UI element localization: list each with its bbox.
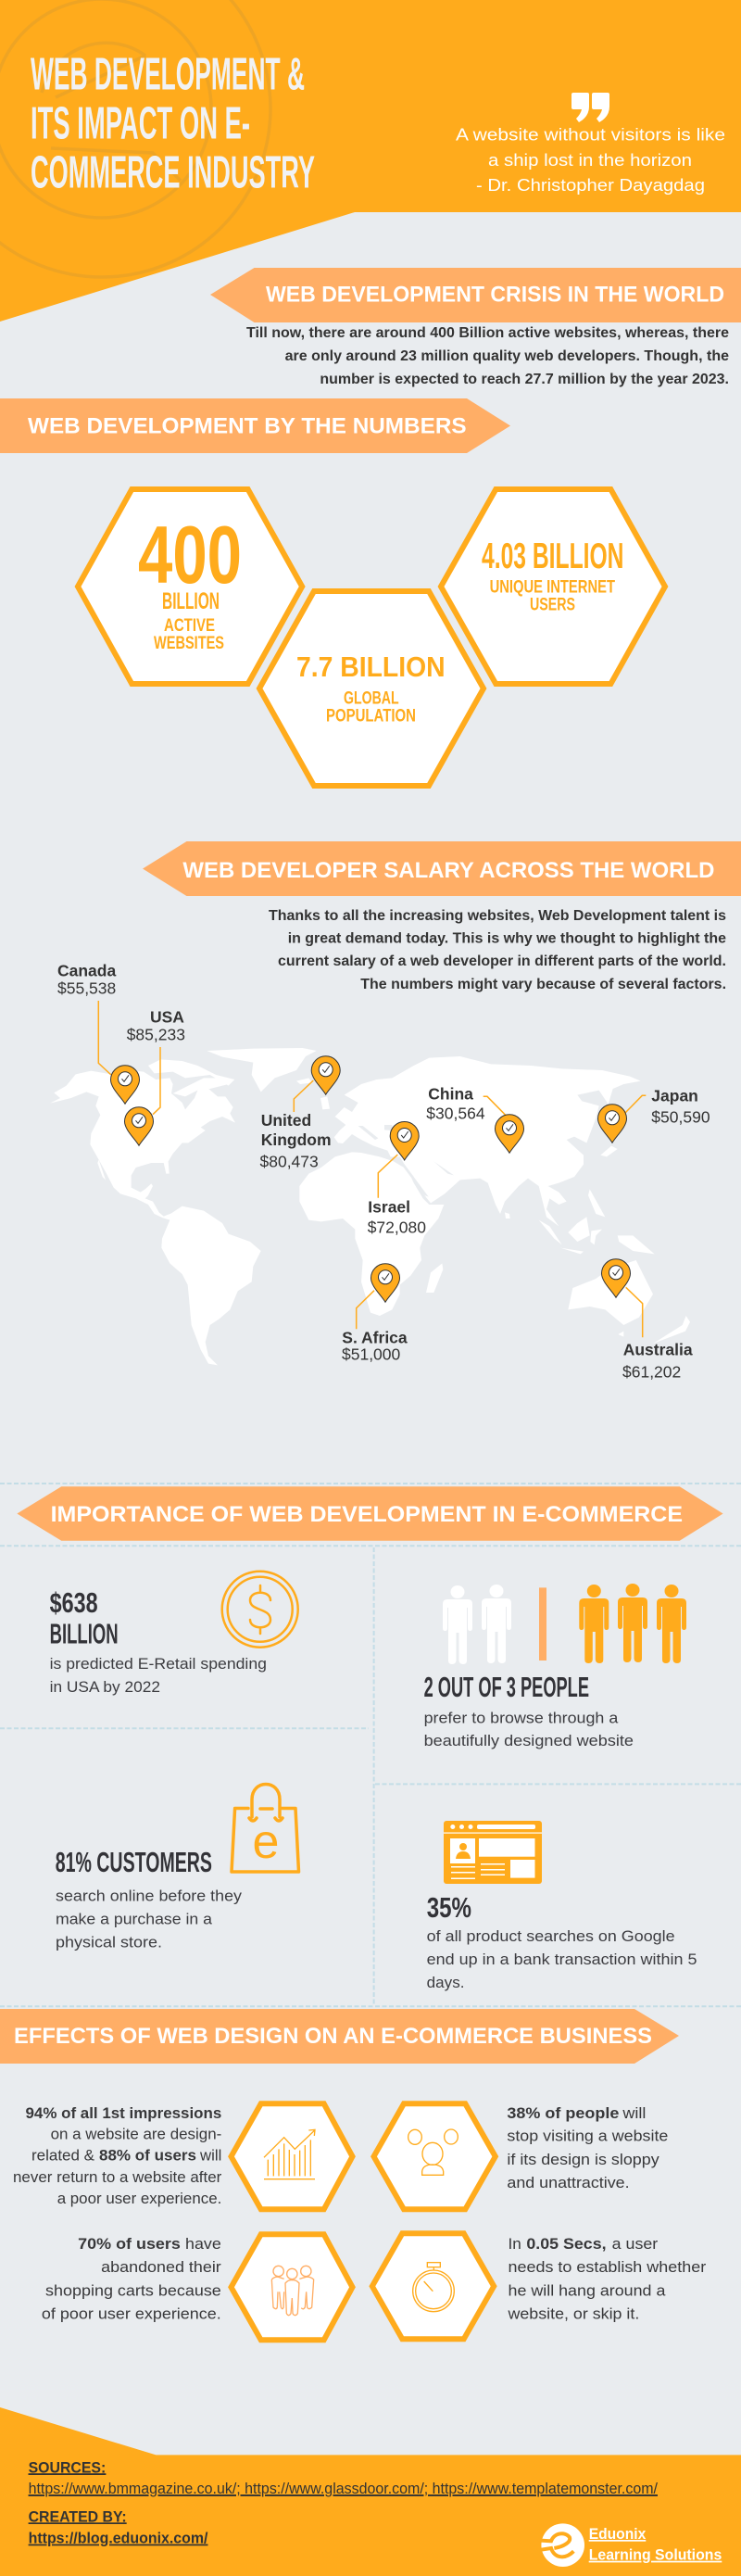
label: Japan xyxy=(651,1086,710,1127)
icon: pin Canada xyxy=(111,1066,139,1104)
text: 94% first impressions xyxy=(13,2104,222,2207)
label: Israel: Israel xyxy=(368,1197,410,1216)
stat: 2 out of 3 people xyxy=(424,1671,634,1749)
heading: crisis in the world: WEB DEVELOPMENT CRISIS IN THE WORLD xyxy=(266,283,724,308)
icon: pin Japan xyxy=(598,1105,626,1143)
label: Australia: Australia xyxy=(623,1341,693,1359)
label: China xyxy=(426,1085,485,1123)
label: USA: USA xyxy=(150,1007,184,1026)
icon: shopping bag: e xyxy=(253,1815,279,1869)
icon: pin South Africa xyxy=(370,1264,400,1302)
text: 70% of users xyxy=(42,2235,221,2322)
text: 70% of users: shopping carts because xyxy=(45,2281,221,2299)
hexagon: 7.7 billion global population: 7.7 BILLION xyxy=(296,651,446,683)
salary paragraph: Thanks to all the increasing websites, Web Development talent is xyxy=(269,908,726,924)
heading: by the numbers: WEB DEVELOPMENT BY THE NUMBERS xyxy=(28,414,467,439)
stat: 2 out of 3 people: prefer to browse through a xyxy=(424,1709,619,1726)
hexagon: 4.03 billion unique internet users: 4.03 BILLION xyxy=(482,537,624,576)
text: 38% of people: stop visiting a website xyxy=(507,2128,668,2145)
text: 94% first impressions: 88% of users xyxy=(99,2147,196,2165)
icon: people 2 of 3 xyxy=(443,1584,686,1664)
text: 0.05 secs: a user xyxy=(612,2235,659,2253)
stat: 35%: 35% xyxy=(427,1891,471,1924)
text: 70% of users: of poor user experience. xyxy=(42,2305,221,2322)
stat: 35%: of all product searches on Google xyxy=(427,1927,675,1945)
text: 38% of people: 38% of people xyxy=(507,2104,619,2122)
quote text xyxy=(456,126,725,195)
label: United Kingdom: Kingdom xyxy=(261,1130,332,1149)
crisis paragraph xyxy=(246,325,729,387)
text: 70% of users: abandoned their xyxy=(101,2258,221,2276)
label: Australia xyxy=(622,1341,693,1382)
stat: 81% customers: 81% CUSTOMERS xyxy=(56,1846,212,1878)
hexagon icon: faces xyxy=(374,2103,496,2209)
stat: $638 billion: in USA by 2022 xyxy=(50,1678,160,1696)
label: USA xyxy=(127,1007,185,1043)
hexagon icon: team xyxy=(232,2234,352,2340)
stat: 35%: end up in a bank transaction within 5 xyxy=(427,1951,697,1968)
icon: pin USA xyxy=(124,1107,154,1145)
crisis paragraph: Till now, there are around 400 Billion active websites, whereas, there xyxy=(246,325,729,341)
created by: CREATED BY: xyxy=(29,2507,127,2525)
icon: quotation mark xyxy=(571,93,609,122)
label: Israel: $72,080 xyxy=(368,1219,426,1237)
text: 0.05 secs: 0.05 Secs, xyxy=(526,2235,607,2253)
text: 0.05 secs: website, or skip it. xyxy=(507,2305,639,2322)
sources: SOURCES: xyxy=(29,2458,106,2476)
quote text: A website without visitors is like xyxy=(456,126,725,145)
title: COMMERCE INDUSTRY xyxy=(31,148,315,198)
logo: Eduonix Learning Solutions: Learning Solutions xyxy=(589,2546,722,2564)
hexagon: 7.7 billion global population: GLOBAL xyxy=(344,688,399,708)
label: United Kingdom: United xyxy=(261,1111,311,1130)
header banner xyxy=(0,0,741,322)
text: 70% of users: have xyxy=(185,2235,221,2253)
stat: 35% xyxy=(427,1891,697,1991)
world map xyxy=(50,1048,690,1365)
heading: effects of web design: EFFECTS OF WEB DESIGN ON AN E-COMMERCE BUSINESS xyxy=(14,2024,652,2049)
hexagon: 4.03 billion unique internet users: UNIQUE INTERNET xyxy=(490,578,615,598)
label: United Kingdom: $80,473 xyxy=(259,1152,319,1170)
stat: $638 billion: BILLION xyxy=(50,1618,119,1649)
sources xyxy=(29,2458,658,2497)
icon: pin United Kingdom xyxy=(311,1056,340,1094)
crisis paragraph: number is expected to reach 27.7 million by the year 2023. xyxy=(320,372,729,387)
label: Israel xyxy=(368,1197,426,1237)
salary paragraph: in great demand today. This is why we thought to highlight the xyxy=(288,930,726,947)
hexagon: 400 billion active websites: 400 xyxy=(138,509,242,600)
stat: $638 billion: $638 xyxy=(50,1586,98,1619)
text: 94% first impressions: a poor user experience. xyxy=(57,2190,221,2207)
text: 94% first impressions: on a website are design- xyxy=(51,2126,221,2143)
sources: https://www.bmmagazine.co.uk/; https://www.glassdoor.com/; https://www.templatemonster.com/ xyxy=(29,2480,658,2497)
hexagon: 400 billion active websites: BILLION xyxy=(162,588,220,614)
heading: importance in e-commerce: IMPORTANCE OF WEB DEVELOPMENT IN E-COMMERCE xyxy=(51,1502,683,1527)
text: 38% of people: will xyxy=(622,2104,646,2122)
text: 94% first impressions: will xyxy=(199,2147,221,2165)
label: Australia: $61,202 xyxy=(622,1363,681,1382)
text: 38% of people xyxy=(507,2104,668,2191)
quote text: a ship lost in the horizon xyxy=(488,151,692,170)
text: 38% of people: and unattractive. xyxy=(507,2174,630,2191)
stat: 35%: days. xyxy=(427,1974,465,1991)
hexagon: 400 billion active websites xyxy=(78,489,302,684)
footer panel xyxy=(0,2407,741,2576)
label: United Kingdom xyxy=(259,1111,332,1170)
heading: salary across the world xyxy=(143,841,741,896)
text: 0.05 secs: In xyxy=(508,2235,521,2253)
heading: crisis in the world xyxy=(210,268,741,322)
label: Canada: Canada xyxy=(57,961,116,979)
stat: 81% customers xyxy=(56,1846,243,1951)
stat: 2 out of 3 people: beautifully designed website xyxy=(424,1732,634,1749)
heading: importance in e-commerce xyxy=(17,1486,723,1541)
salary paragraph: The numbers might vary because of several factors. xyxy=(360,977,726,992)
title: ITS IMPACT ON E- xyxy=(31,98,250,148)
quote text: - Dr. Christopher Dayagdag xyxy=(476,176,705,195)
hexagon: 4.03 billion unique internet users: USERS xyxy=(530,595,575,614)
label: South Africa xyxy=(342,1328,408,1364)
label: China: China xyxy=(428,1085,473,1104)
label: Canada: $55,538 xyxy=(57,979,116,998)
label: South Africa: $51,000 xyxy=(342,1345,401,1364)
text: 0.05 secs: he will hang around a xyxy=(508,2281,666,2299)
stat: 2 out of 3 people: 2 OUT OF 3 PEOPLE xyxy=(424,1671,589,1703)
created by: https://blog.eduonix.com/ xyxy=(29,2530,208,2547)
created by xyxy=(29,2507,208,2547)
crisis paragraph: are only around 23 million quality web developers. Though, the xyxy=(285,348,729,364)
hexagon: 7.7 billion global population: POPULATION xyxy=(326,706,416,726)
logo: Eduonix Learning Solutions: Eduonix xyxy=(589,2525,647,2543)
logo: Eduonix Learning Solutions xyxy=(541,2523,722,2567)
icon: pin Israel xyxy=(390,1121,419,1160)
text: 0.05 secs xyxy=(507,2235,707,2322)
stat: 81% customers: make a purchase in a xyxy=(56,1910,213,1927)
text: 94% first impressions: 94% of all 1st impressions xyxy=(26,2104,221,2122)
label: USA: $85,233 xyxy=(127,1025,185,1043)
connector lines xyxy=(98,1001,646,1337)
hexagon: 7.7 billion global population xyxy=(259,591,484,786)
stat: 81% customers: search online before they xyxy=(56,1887,243,1905)
text: 94% first impressions: related & xyxy=(31,2147,95,2165)
hexagon: 4.03 billion unique internet users xyxy=(441,489,665,684)
label: Japan: $50,590 xyxy=(651,1108,710,1127)
icon: shopping bag xyxy=(232,1785,298,1872)
hexagon: 400 billion active websites: ACTIVE xyxy=(164,616,215,636)
heading: by the numbers xyxy=(0,398,510,453)
stat: $638 billion xyxy=(50,1586,267,1696)
icon: dollar coin xyxy=(222,1572,298,1648)
icon: pin Australia xyxy=(602,1259,630,1297)
label: Canada xyxy=(57,961,116,998)
icon: pin China xyxy=(495,1115,524,1153)
hexagon: 400 billion active websites: WEBSITES xyxy=(154,634,224,653)
salary paragraph xyxy=(269,908,726,992)
label: South Africa: S. Africa xyxy=(342,1328,408,1346)
heading: effects of web design xyxy=(0,2009,679,2064)
icon: browser window xyxy=(444,1821,542,1884)
label: Japan: Japan xyxy=(651,1086,698,1105)
label: China: $30,564 xyxy=(426,1105,485,1123)
heading: salary across the world: WEB DEVELOPER SALARY ACROSS THE WORLD xyxy=(182,858,714,883)
title: WEB DEVELOPMENT & xyxy=(31,50,305,100)
text: 38% of people: if its design is sloppy xyxy=(507,2151,659,2168)
stat: 81% customers: physical store. xyxy=(56,1933,162,1951)
title xyxy=(31,50,315,198)
hexagon icon: stopwatch xyxy=(372,2233,494,2339)
hexagon icon: growth chart xyxy=(232,2103,352,2209)
salary paragraph: current salary of a web developer in different parts of the world. xyxy=(278,953,726,969)
text: 0.05 secs: needs to establish whether xyxy=(508,2258,707,2276)
stat: $638 billion: is predicted E-Retail spending xyxy=(50,1655,267,1673)
text: 70% of users: 70% of users xyxy=(78,2235,181,2253)
text: 94% first impressions: never return to a website after xyxy=(13,2168,222,2186)
